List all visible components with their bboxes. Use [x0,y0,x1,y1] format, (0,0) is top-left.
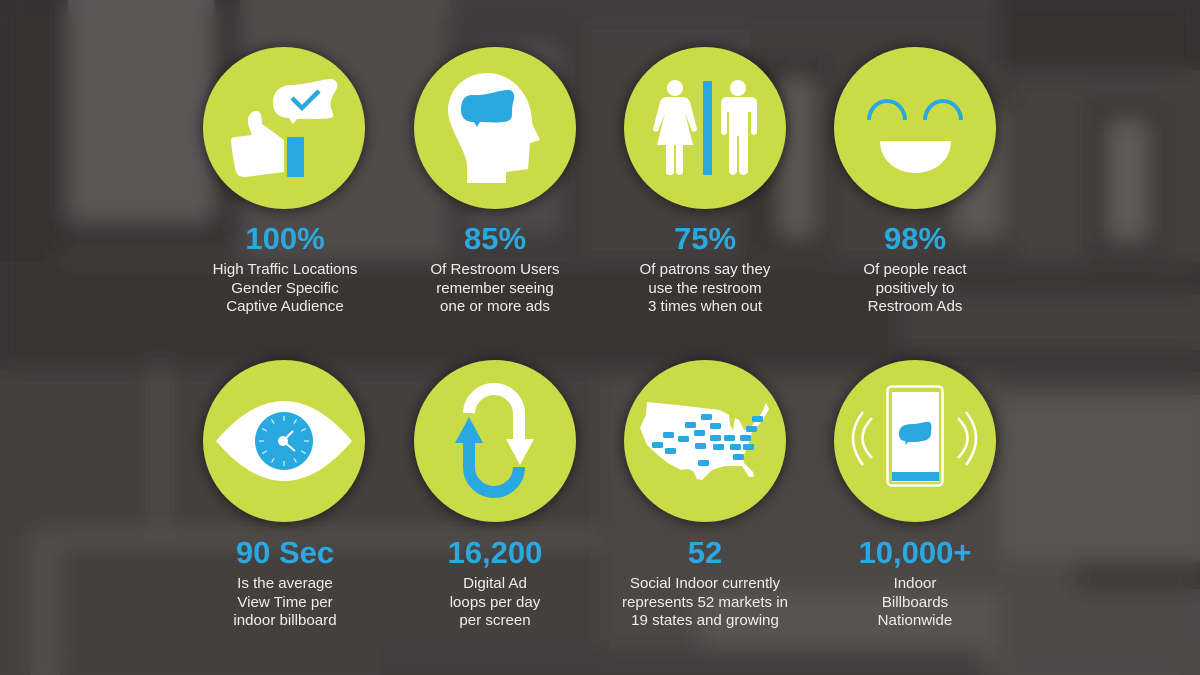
panel: high traffic locations [201,46,367,315]
caption: patrons: 3 times when out [648,298,763,315]
stat: 100%: 100% [245,221,325,256]
caption: billboards: Indoor [894,575,936,592]
stat: 75%: 75% [674,221,736,256]
panel: indoor billboards [832,359,998,629]
panel: restroom users remember [412,46,578,315]
caption: loops: per screen [459,612,531,629]
icon: loop arrows [412,359,578,525]
caption: markets: Social Indoor currently [630,575,781,592]
caption: billboards: Nationwide [878,612,952,629]
caption: loops: loops per day [450,594,541,611]
icon: thumbs up with check bubble [201,46,367,212]
caption: high traffic: Gender Specific [231,280,339,297]
panel: markets [622,359,788,629]
panel: patrons use restroom [622,46,788,315]
caption: loops: Digital Ad [463,575,527,592]
caption: patrons: use the restroom [648,280,762,297]
stat: 16,200: 16,200 [448,535,542,570]
caption: markets: represents 52 markets in [622,594,788,611]
caption: react positively: Restroom Ads [868,298,962,315]
stat: 10,000+: 10,000+ [859,535,971,570]
icon: US map with markets [622,359,788,525]
caption: high traffic: High Traffic Locations [213,261,357,278]
caption: restroom users: Of Restroom Users [430,261,560,278]
panel: digital ad loops [412,359,578,629]
stat: 52: 52 [688,535,722,570]
caption: view time: indoor billboard [233,612,337,629]
panel: average view time [201,359,367,629]
caption: view time: Is the average [237,575,333,592]
caption: markets: 19 states and growing [631,612,779,629]
icon: smiling face [832,46,998,212]
caption: react positively: Of people react [863,261,967,278]
caption: patrons: Of patrons say they [640,261,771,278]
icon: head with blue thought bubble [412,46,578,212]
stat: 85%: 85% [464,221,526,256]
icon: vibrating phone [832,359,998,525]
caption: billboards: Billboards [882,594,948,611]
icon: eye with clock [201,359,367,525]
stat: 90 Sec: 90 Sec [236,535,334,570]
caption: react positively: positively to [876,280,954,297]
caption: view time: View Time per [237,594,333,611]
stat: 98%: 98% [884,221,946,256]
icon: restroom woman and man [622,46,788,212]
caption: high traffic: Captive Audience [226,298,344,315]
caption: restroom users: remember seeing [436,280,554,297]
panel: react positively [832,46,998,315]
caption: restroom users: one or more ads [440,298,550,315]
